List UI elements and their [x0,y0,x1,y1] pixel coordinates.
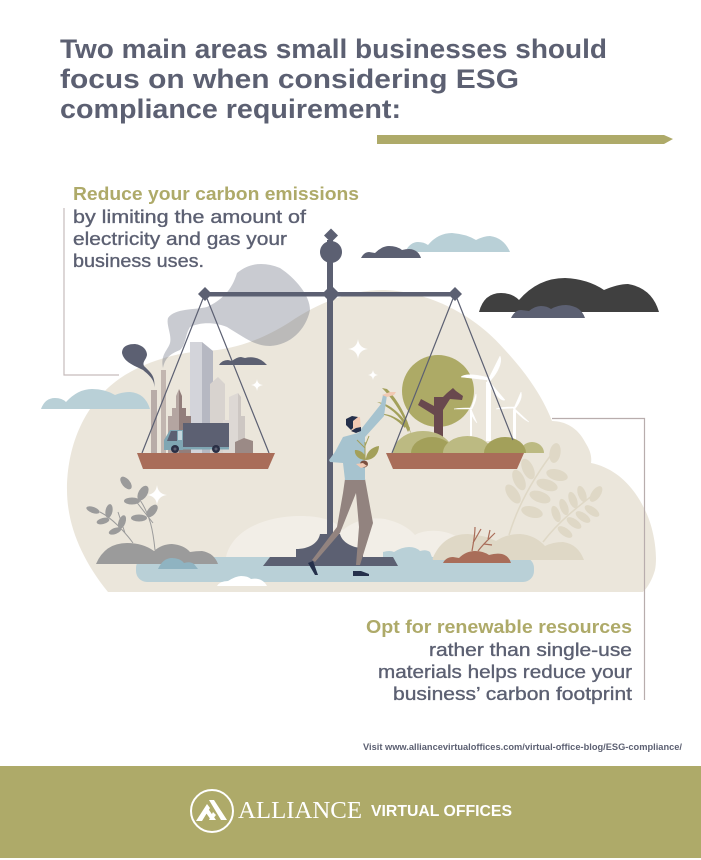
small cloud over skyline [219,357,267,365]
callout: opt for renewable resources: Opt for renewable resources [366,616,632,637]
left pan [137,453,275,469]
scale strings [142,296,513,453]
connector line: left callout [64,208,119,375]
callout: opt for renewable resources [366,616,632,704]
blue mound [158,558,198,569]
beige plant [432,442,605,560]
footer band [0,766,701,858]
callout: reduce carbon emissions: by limiting the amount of [73,206,307,227]
logo: VIRTUAL OFFICES [371,803,512,820]
man with seedling [308,392,396,576]
connector line: right callout [552,418,644,700]
callout: reduce carbon emissions: Reduce your carbon emissions [73,183,359,204]
callout: opt for renewable resources: rather than single-use [429,639,632,660]
smoke: dark plume [122,344,154,388]
raised hand [382,392,396,397]
right pan [386,453,524,469]
shoes [308,561,369,576]
right pan scene: tree [402,355,474,438]
callout: reduce carbon emissions: business uses. [73,250,204,271]
title: focus on when considering ESG [60,64,519,94]
logo mark [191,790,233,832]
accent arrow bar [377,135,673,144]
red mound with twigs [443,527,511,563]
sweater [329,395,387,480]
city skyline [151,342,253,453]
head [349,417,361,432]
illustration: scale and landscape [41,228,659,592]
water [136,557,534,582]
logo [191,790,512,832]
large charcoal cloud [479,278,659,312]
callout: opt for renewable resources: business’ carbon footprint [393,683,632,704]
scale stand [198,228,462,566]
logo wordmark: ALLIANCE [238,798,362,824]
callout: reduce carbon emissions: electricity and gas your [73,228,287,249]
source url: Visit www.alliancevirtualoffices.com/virtual-office-blog/ESG-compliance/ [363,742,682,753]
title [60,34,607,124]
left cloud [41,389,150,409]
pale hills [226,516,457,557]
seedling [357,436,369,460]
blue bushes [383,547,433,560]
sparkles [147,339,378,505]
background blob [67,290,656,592]
truck [164,423,229,453]
white cloud bottom [217,576,267,586]
wind turbines [454,356,529,441]
title: Two main areas small businesses should [60,34,607,64]
grey plant [85,475,218,564]
smoke: light plume [162,264,310,368]
callout: reduce carbon emissions [73,183,359,271]
title: compliance requirement: [60,94,401,124]
top blue cloud [405,233,510,252]
legs [312,479,373,565]
right pan bushes [393,431,544,453]
top dark cloud [361,246,421,258]
callout: opt for renewable resources: materials helps reduce your [378,661,632,682]
slate cloud [511,305,585,318]
plant behind hand [375,388,411,434]
